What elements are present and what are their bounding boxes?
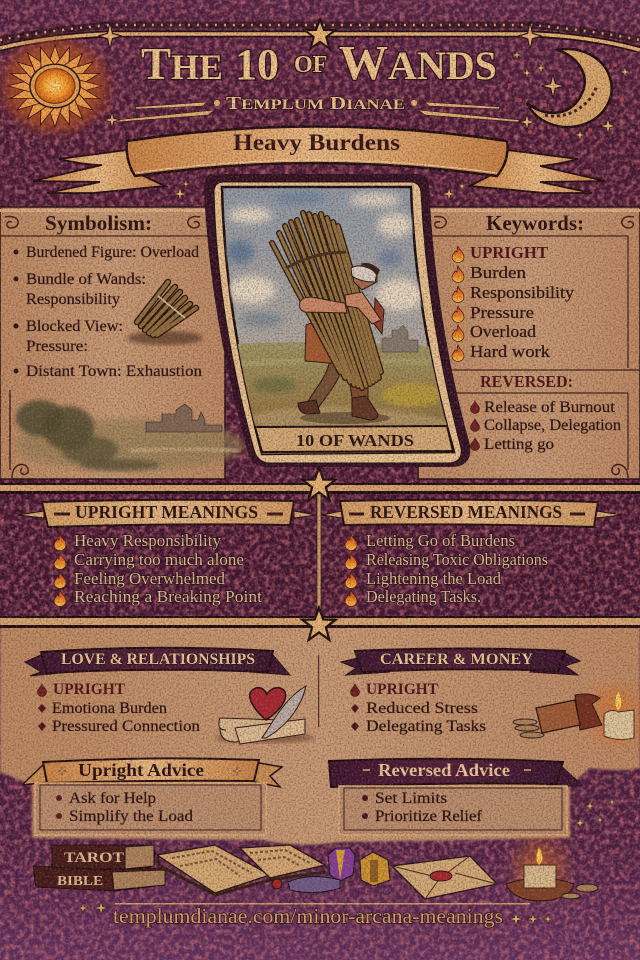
icon: flourishes: [5, 217, 200, 478]
banner: love and relationships: [25, 648, 290, 676]
footer url: templumdianae.com/minor-arcana-meanings: [113, 904, 503, 928]
reversed meanings list: Delegating Tasks.: [366, 587, 481, 606]
icon: flourishes: [434, 217, 634, 478]
icon: sun: [0, 32, 117, 140]
books: tarot and bible: TAROT: [64, 850, 124, 866]
banner: career and money: CAREER & MONEY: [380, 651, 533, 668]
heading: Reversed: REVERSED:: [480, 372, 573, 391]
icon: heart, quill and scrolls: [215, 686, 315, 744]
card illustration: [220, 192, 455, 460]
love list: UPRIGHT: [53, 681, 125, 698]
reversed advice list: Set Limits: [375, 790, 447, 807]
section: career and money: [341, 648, 640, 743]
books: tarot and bible: BIBLE: [57, 874, 103, 889]
banner: reversed meanings: [322, 500, 622, 527]
love list: Pressured Connection: [52, 718, 200, 735]
panel: love and career parchment: [0, 626, 640, 845]
upright advice list: Ask for Help: [69, 790, 156, 807]
upright meanings list: Feeling Overwhelmed: [74, 569, 226, 588]
career list: UPRIGHT: [366, 681, 438, 698]
symbolism list: Responsibility: [26, 291, 120, 308]
crystals and stone: [272, 848, 390, 893]
upright meanings list: Heavy Responsibility: [74, 531, 222, 550]
books: tarot and bible: [33, 845, 165, 891]
divider band with star: [0, 468, 640, 500]
upright meanings list: [54, 531, 262, 606]
upright advice list: [56, 790, 193, 825]
figure: legs and tunic: [298, 298, 390, 424]
keywords reversed list: [470, 399, 621, 453]
keywords upright list: Overload: [470, 322, 537, 341]
love list: [38, 681, 200, 735]
keywords upright list: Responsibility: [470, 283, 575, 302]
decoration: star cluster: [575, 798, 616, 828]
illustration: distant town landscape: [15, 400, 245, 471]
banner: career and money: [341, 648, 580, 675]
keywords upright list: Pressure: [470, 303, 534, 322]
career list: Delegating Tasks: [366, 718, 486, 735]
heading: Symbolism: Symbolism:: [45, 211, 152, 235]
title: WANDS: [339, 35, 497, 90]
panel: keywords: [418, 207, 640, 479]
section: love and relationships: [25, 648, 315, 744]
icon: crescent moon: [512, 49, 630, 140]
symbolism list: Burdened Figure: Overload: [26, 244, 199, 261]
banner: upright meanings: UPRIGHT MEANINGS: [75, 502, 258, 522]
banner: reversed advice: [329, 759, 582, 788]
figure: arms and head: [300, 263, 381, 324]
keywords upright list: UPRIGHT: [470, 243, 549, 262]
reversed meanings list: Letting Go of Burdens: [366, 531, 515, 550]
banner: love and relationships: LOVE & RELATIONSHIPS: [61, 651, 255, 668]
career list: [350, 681, 486, 735]
candle in dish: [506, 842, 598, 901]
banner: Heavy Burdens: [33, 126, 605, 201]
banner: upright advice: [22, 758, 282, 787]
decoration: footer stars: [78, 901, 553, 926]
banner: reversed meanings: REVERSED MEANINGS: [370, 502, 562, 522]
figure: bundle of ten wands: [272, 213, 381, 388]
reversed meanings list: [345, 531, 548, 606]
symbolism list: Pressure:: [26, 338, 88, 355]
keywords upright list: Hard work: [470, 342, 551, 361]
title: [141, 35, 497, 90]
banner: upright advice: Upright Advice: [78, 760, 204, 780]
symbolism list: Blocked View:: [26, 318, 123, 335]
symbolism list: Bundle of Wands:: [26, 271, 146, 288]
upright meanings list: Carrying too much alone: [74, 550, 244, 569]
reversed meanings list: Lightening the Load: [366, 569, 502, 588]
icon: small bundle of wands: [127, 282, 203, 345]
icon: chest, coins and candle: [513, 687, 640, 743]
keywords upright list: Burden: [470, 263, 526, 282]
decoration: speckle clusters: [106, 63, 630, 136]
reversed meanings list: Releasing Toxic Obligations: [366, 550, 548, 569]
banner: reversed advice: Reversed Advice: [378, 760, 510, 780]
keywords reversed list: Letting go: [484, 436, 554, 453]
symbolism list: Distant Town: Exhaustion: [26, 363, 202, 380]
thin column divider: [318, 655, 319, 727]
banner: upright meanings: [18, 500, 316, 527]
reversed advice list: [362, 790, 483, 825]
keywords reversed list: Release of Burnout: [484, 399, 616, 416]
header ornament band: [0, 19, 640, 50]
reversed advice list: Prioritize Relief: [375, 808, 483, 825]
card caption strip: [255, 426, 453, 452]
title: THE: [141, 39, 223, 89]
subtitle: Templum Dianae: TEMPLUM D IANAE: [226, 93, 405, 113]
love list: Emotiona Burden: [52, 700, 167, 717]
career list: Reduced Stress: [366, 700, 478, 717]
symbolism list: [14, 244, 202, 380]
distant castle: [382, 325, 418, 352]
heading: Keywords: Keywords:: [486, 211, 584, 235]
divider band with star: [0, 608, 640, 640]
open book: [157, 845, 325, 895]
keywords upright list: [452, 243, 575, 362]
upright meanings list: Reaching a Breaking Point: [74, 587, 262, 606]
keywords reversed list: Collapse, Delegation: [484, 417, 621, 434]
upright advice list: Simplify the Load: [69, 808, 193, 825]
card caption: 10 OF WANDS: [296, 431, 414, 450]
panel: upright advice: [35, 783, 266, 835]
tarot card: [204, 174, 470, 467]
title: OF: [294, 52, 327, 78]
banner: Heavy Burdens: Heavy Burdens: [233, 130, 400, 155]
panel: reversed advice: [339, 786, 567, 835]
subtitle: Templum Dianae: [104, 93, 520, 128]
title: 10: [235, 40, 279, 89]
envelope with wax seal: [392, 856, 497, 899]
panel: symbolism: [0, 207, 245, 479]
footer rule: [115, 903, 530, 904]
section: meanings: [18, 494, 622, 616]
